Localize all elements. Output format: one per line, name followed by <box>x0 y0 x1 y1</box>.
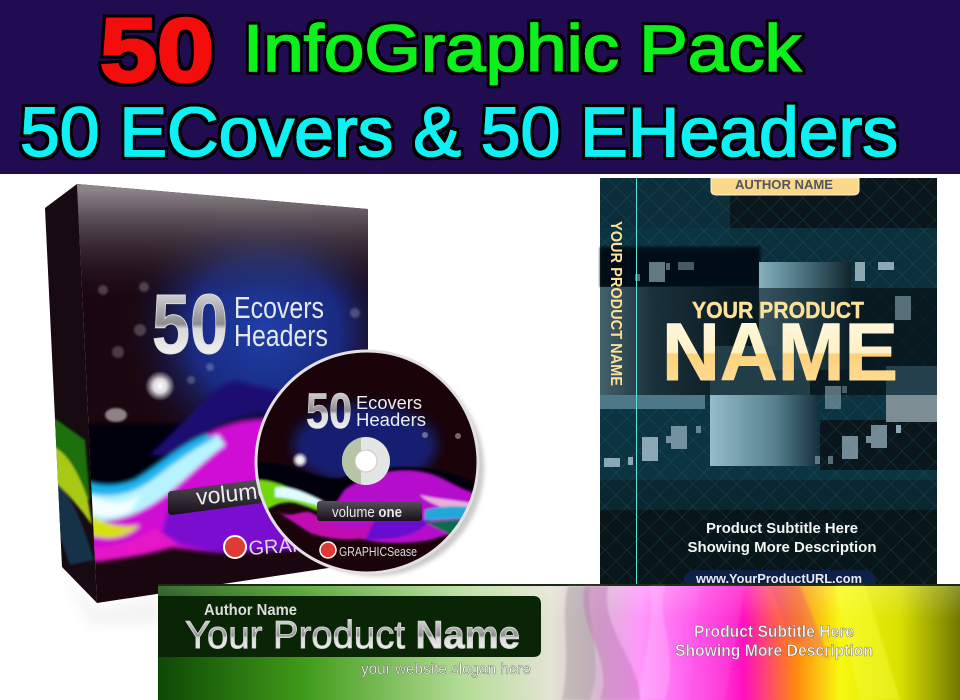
box title: Headers: Headers <box>234 318 328 353</box>
banner slogan: your website slogan here <box>361 661 531 678</box>
disc title: 50: 50 <box>306 383 352 439</box>
cover subtitle: Product Subtitle Here <box>706 520 858 537</box>
light orbs <box>73 282 360 422</box>
box reflection <box>62 572 160 625</box>
box side waves <box>50 415 94 565</box>
banner subtitle: Product Subtitle Here <box>694 623 854 641</box>
indigo hump <box>147 380 280 460</box>
disc waves <box>255 462 480 543</box>
product box <box>45 184 369 625</box>
disc title: Ecovers: Ecovers <box>356 393 422 413</box>
cover subtitle: Showing More Description <box>688 539 876 556</box>
headline: 50 ECovers & 50 EHeaders: 50 ECovers & 50 EHeaders <box>20 93 898 171</box>
box logo <box>223 535 296 559</box>
box front face <box>73 184 369 604</box>
box volume pill <box>168 480 262 515</box>
header band <box>0 0 960 174</box>
disc rim <box>256 351 478 573</box>
disc title: Headers: Headers <box>356 410 426 430</box>
disc volume pill <box>317 501 422 521</box>
banner subtitle <box>675 623 873 660</box>
cover translucent panels <box>600 262 937 466</box>
spine line <box>636 178 637 584</box>
disc volume pill: volume one <box>332 504 402 521</box>
banner subtitle: Showing More Description <box>675 642 873 660</box>
cover url pill: www.YourProductURL.com <box>695 571 862 586</box>
disc logo <box>320 542 417 559</box>
yellow and low magenta bands <box>92 513 144 543</box>
banner ribbons <box>562 586 900 700</box>
cover url pill <box>684 570 876 592</box>
banner author name: Author Name <box>204 602 297 619</box>
black wave band <box>88 422 182 488</box>
box volume pill: volume <box>195 476 271 510</box>
author name tab: AUTHOR NAME <box>735 177 833 192</box>
banner top edge <box>158 584 960 586</box>
book cover <box>600 177 937 592</box>
box title: 50: 50 <box>152 277 228 371</box>
disc <box>255 350 484 576</box>
cover subtitle <box>688 520 876 556</box>
spine title: YOUR PRODUCT NAME <box>607 221 624 386</box>
box waves <box>88 380 300 566</box>
author name tab <box>711 177 859 195</box>
cover small squares <box>604 262 911 467</box>
headline: InfoGraphic Pack: InfoGraphic Pack <box>243 11 802 85</box>
banner product name: Your Product Name <box>185 614 520 657</box>
cover title: NAME: NAME <box>662 307 898 398</box>
web header banner <box>158 584 960 700</box>
disc body <box>255 350 479 574</box>
disc logo: GRAPHICSease <box>339 544 417 559</box>
disc hub <box>342 437 390 485</box>
headline: 50: 50 <box>100 1 214 101</box>
box side face <box>45 184 97 603</box>
cover mesh and tint bands <box>600 178 937 584</box>
cover dark strip <box>600 247 760 287</box>
cover title: YOUR PRODUCT: YOUR PRODUCT <box>692 297 864 323</box>
box title: Ecovers: Ecovers <box>234 290 324 325</box>
cyan and white wave <box>77 435 225 521</box>
box logo: GRAPH <box>248 533 320 560</box>
disc shadow <box>268 360 484 576</box>
banner title plate <box>158 596 541 657</box>
magenta wave <box>94 414 264 564</box>
